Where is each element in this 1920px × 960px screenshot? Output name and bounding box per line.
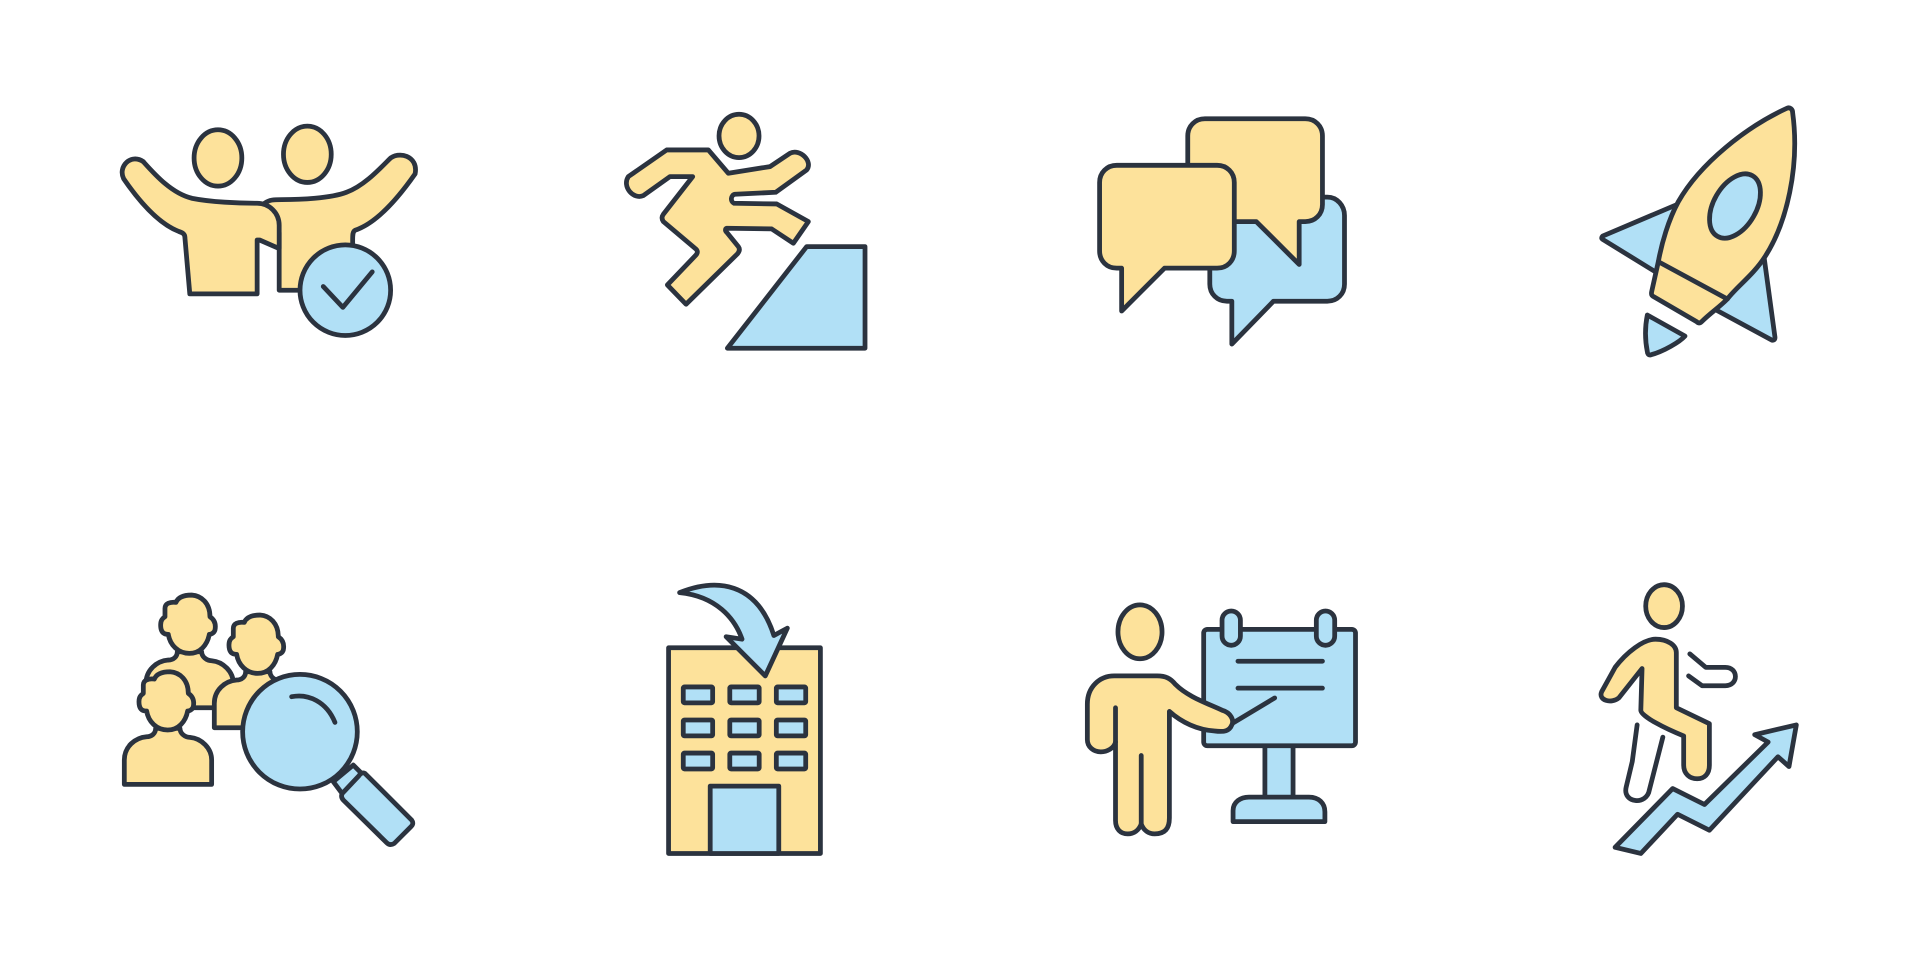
- icon: magnifying glass: [243, 674, 413, 845]
- person front: [124, 672, 212, 784]
- door: [710, 786, 779, 853]
- icon: two people with check mark: [122, 126, 416, 336]
- icon: presenter at board: [1087, 605, 1356, 834]
- icon: check badge: [300, 245, 391, 336]
- arrow: [680, 585, 787, 676]
- icon: rocket: [1602, 108, 1795, 355]
- person back left: [146, 595, 233, 708]
- windows: [683, 687, 806, 769]
- growth arrow: [1615, 725, 1796, 853]
- icon: block: [727, 247, 865, 348]
- icon: people with magnifying glass: [124, 595, 413, 845]
- icon: runner leaping onto block: [626, 114, 865, 348]
- icon: office building with arrow: [669, 585, 820, 853]
- icon: speech bubbles: [1100, 119, 1344, 344]
- board: [1204, 611, 1356, 822]
- person back right: [214, 615, 302, 728]
- icon: person climbing growth arrow: [1601, 585, 1796, 853]
